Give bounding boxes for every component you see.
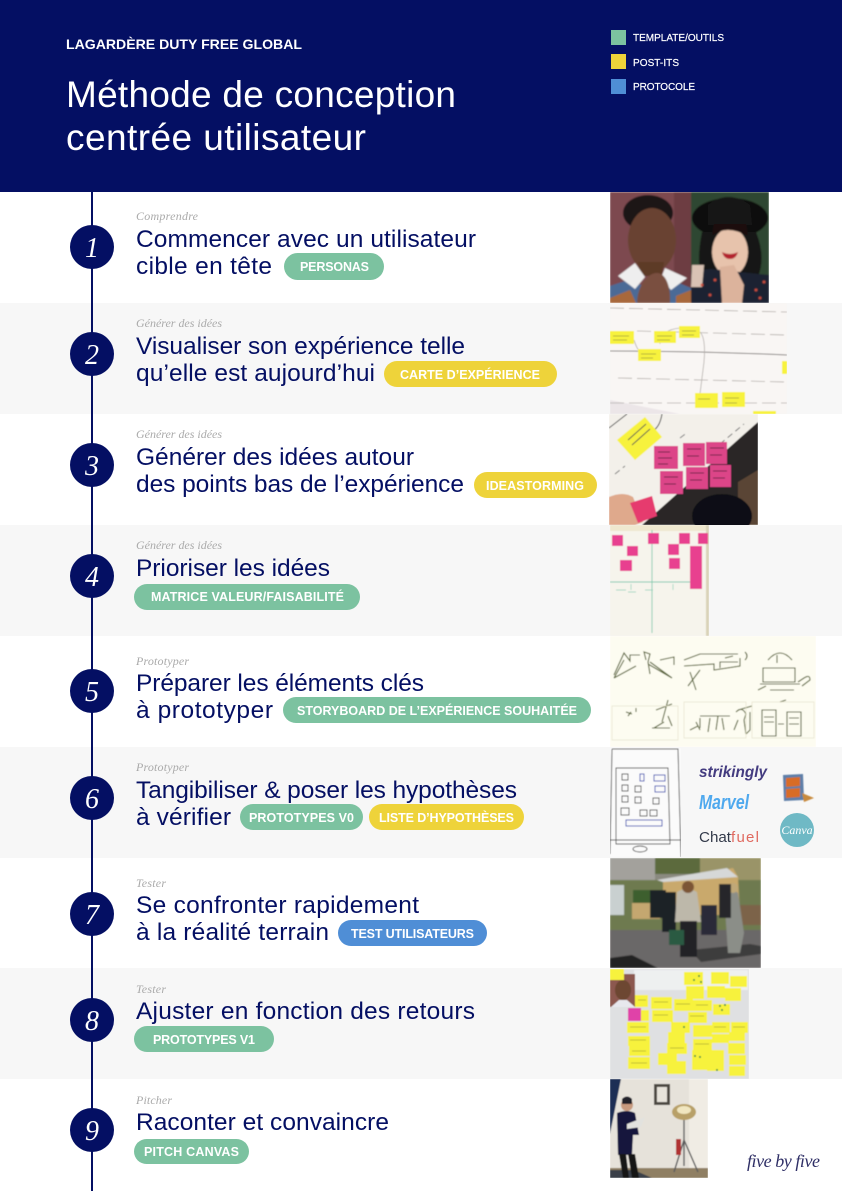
step 7 heading: à la réalité terrain [136, 919, 329, 946]
step 7 category: Tester [136, 876, 166, 890]
tag: prototypes v0: PROTOTYPES V0 [249, 811, 354, 825]
title: centrée utilisateur [66, 117, 366, 158]
step 5 heading [136, 670, 424, 724]
number badge 5: 5 [85, 677, 99, 708]
step 5 heading: à prototyper [136, 697, 273, 724]
step 6 category: Prototyper [135, 760, 189, 774]
tag: ideastorming: IDEASTORMING [486, 479, 584, 493]
number badge 9 [70, 1108, 114, 1152]
tag: prototypes v1 [134, 1026, 274, 1052]
tag: test utilisateurs: TEST UTILISATEURS [351, 927, 474, 941]
tag: storyboard [283, 697, 591, 723]
step 2 heading [136, 333, 465, 387]
tag: ideastorming [474, 472, 597, 498]
title [66, 74, 456, 158]
tag: pitch canvas: PITCH CANVAS [144, 1145, 239, 1159]
header panel [0, 0, 842, 192]
tool logos: fuel [731, 829, 759, 846]
step 6 heading [136, 777, 517, 831]
tool logos [699, 764, 814, 847]
photo: ideastorming post-its [609, 414, 758, 525]
tag: liste d'hypothèses [369, 804, 524, 830]
number badge 4: 4 [85, 562, 99, 593]
number badge 6: 6 [85, 784, 99, 815]
tool logos: strikingly [699, 764, 768, 781]
step 8 heading: Ajuster en fonction des retours [136, 998, 475, 1025]
step 3 category: Générer des idées [136, 427, 222, 441]
step 1 heading [136, 226, 476, 280]
step 2 heading: qu’elle est aujourd’hui [136, 360, 375, 387]
step 1 category: Comprendre [136, 209, 199, 223]
step 9 heading: Raconter et convaincre [136, 1109, 389, 1136]
step 4 heading: Prioriser les idées [136, 555, 330, 582]
step 3 heading [136, 444, 464, 498]
icon: canva logo: Canva [781, 823, 813, 837]
five by five logo: five by five [747, 1151, 820, 1171]
tool logos: Chat [699, 829, 732, 846]
photo: experience map [610, 303, 787, 414]
number badge 9: 9 [85, 1116, 99, 1147]
tag: carte d'expérience: CARTE D’EXPÉRIENCE [400, 367, 540, 382]
step 7 heading: Se confronter rapidement [136, 892, 419, 919]
step 7 heading [136, 892, 419, 946]
number badge 8: 8 [85, 1006, 99, 1037]
number badge 3: 3 [84, 451, 99, 482]
step 3 [70, 427, 597, 498]
step 2 category: Générer des idées [136, 316, 222, 330]
step 5 category: Prototyper [135, 654, 189, 668]
client name: LAGARDÈRE DUTY FREE GLOBAL [66, 36, 302, 52]
step 2 heading: Visualiser son expérience telle [136, 333, 465, 360]
number badge 7: 7 [85, 900, 100, 931]
tag: liste d'hypothèses: LISTE D’HYPOTHÈSES [379, 810, 514, 825]
step 4 [70, 538, 360, 610]
number badge 2: 2 [85, 340, 99, 371]
icon: film strip [783, 774, 814, 802]
step 5 [70, 654, 591, 724]
title: Méthode de conception [66, 74, 456, 115]
photo: paper prototype [610, 748, 681, 857]
number badge 1: 1 [85, 233, 99, 264]
tag: personas [284, 253, 384, 280]
alternating row bands [0, 303, 842, 1079]
timeline vertical line [91, 192, 93, 1191]
step 3 heading: des points bas de l’expérience [136, 471, 464, 498]
step 4 category: Générer des idées [136, 538, 222, 552]
step 9 [70, 1093, 389, 1164]
legend: POST-ITS [633, 58, 679, 69]
tag: personas: PERSONAS [300, 260, 369, 274]
step 1 heading: Commencer avec un utilisateur [136, 226, 476, 253]
tag: prototypes v1: PROTOTYPES V1 [153, 1033, 255, 1047]
photo: feedback post-its [610, 969, 749, 1079]
photo: pitching presenter [610, 1079, 708, 1178]
step 6 heading: Tangibiliser & poser les hypothèses [136, 777, 517, 804]
photo: storyboard sketches [610, 636, 816, 747]
photo: personas portraits [610, 192, 769, 303]
legend: PROTOCOLE [633, 82, 695, 93]
tag: pitch canvas [134, 1139, 249, 1164]
step 9 category: Pitcher [135, 1093, 172, 1107]
step 6 heading: à vérifier [136, 804, 231, 831]
number badge 6 [70, 776, 114, 820]
tag: test utilisateurs [338, 920, 487, 946]
tag: carte d'expérience [384, 361, 557, 387]
number badge 2 [70, 332, 114, 376]
step 1 heading: cible en tête [136, 253, 272, 280]
photo: value/feasibility matrix [610, 525, 709, 636]
step 8 category: Tester [136, 982, 166, 996]
step 3 heading: Générer des idées autour [136, 444, 414, 471]
step 1 [70, 209, 476, 280]
number badge 7 [70, 892, 114, 936]
tag: matrice valeur/faisabilité [134, 584, 360, 610]
tag: storyboard: STORYBOARD DE L’EXPÉRIENCE SOUHAITÉE [297, 703, 577, 718]
step 2 [70, 316, 557, 387]
tag: prototypes v0 [240, 804, 363, 830]
legend: TEMPLATE/OUTILS [633, 33, 724, 44]
tag: matrice valeur/faisabilité: MATRICE VALEUR/FAISABILITÉ [151, 589, 344, 604]
number badge 3 [70, 443, 114, 487]
number badge 8 [70, 998, 114, 1042]
number badge 4 [70, 554, 114, 598]
number badge 5 [70, 669, 114, 713]
step 7 [70, 876, 487, 946]
legend [611, 30, 724, 94]
photo: field user test [610, 858, 761, 968]
step 8 [70, 982, 475, 1052]
tool logos: Marvel [699, 792, 749, 814]
step 5 heading: Préparer les éléments clés [136, 670, 424, 697]
step 6 [70, 760, 524, 831]
number badge 1 [70, 225, 114, 269]
